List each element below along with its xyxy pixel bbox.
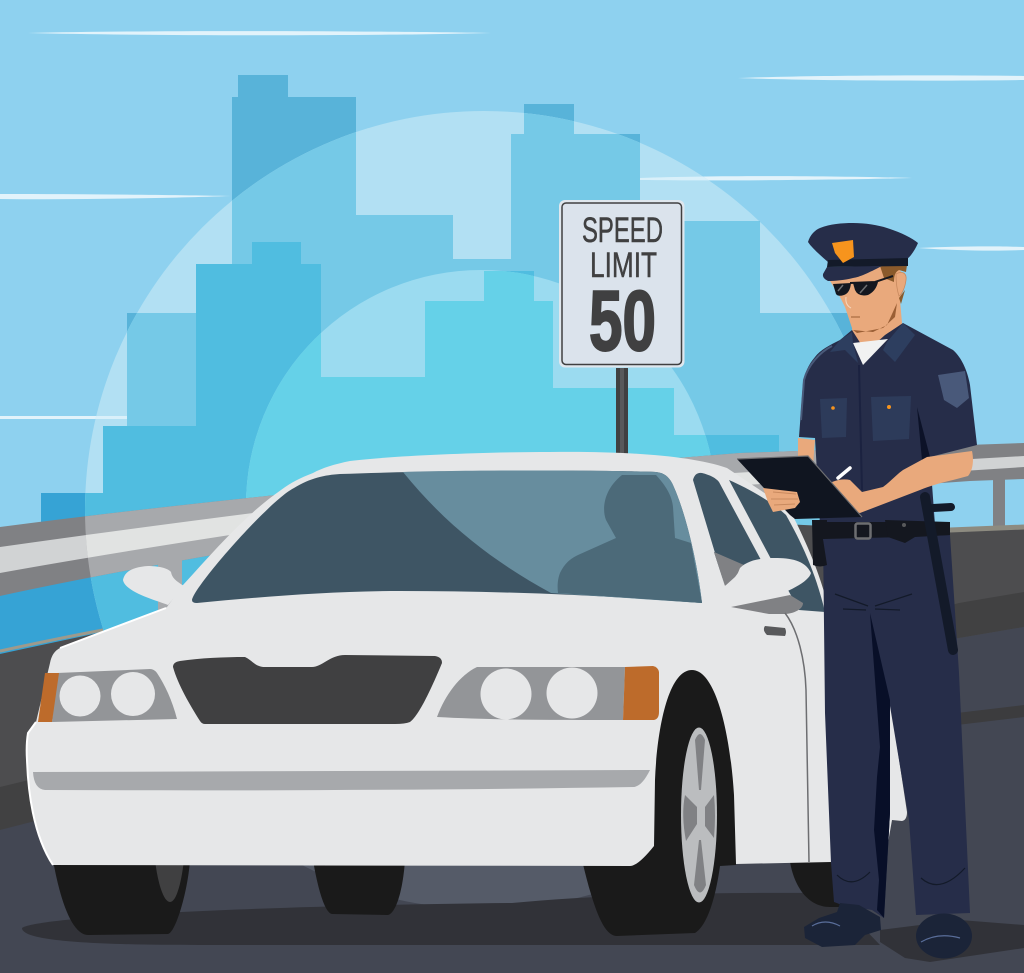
jaw shadow [853, 303, 897, 333]
road dark stripe [940, 705, 1024, 727]
sign plate [559, 200, 684, 368]
left headlight [38, 669, 177, 722]
outer dome with lighter skyline [85, 111, 844, 630]
bumper strip [33, 770, 650, 790]
door line [785, 613, 809, 862]
right shoe [916, 914, 972, 958]
right mirror [723, 558, 811, 614]
baton [925, 497, 953, 650]
road shoulder [0, 520, 1024, 973]
curb lines [0, 527, 1024, 651]
officer left arm [798, 438, 815, 465]
shoulder patch [938, 371, 969, 408]
highway guard rail [0, 443, 1024, 620]
pocket buttons [831, 405, 891, 410]
front grille [173, 655, 442, 724]
front left tire [53, 860, 190, 935]
dome reflection on road [304, 866, 591, 904]
white t-shirt [853, 339, 888, 365]
right headlight [437, 666, 659, 720]
duty belt [812, 520, 950, 566]
side windows [693, 473, 825, 612]
road surface [0, 627, 1024, 973]
placket line [859, 365, 862, 490]
dark shoulder band [0, 592, 1024, 830]
cloud streaks [0, 31, 1024, 419]
sign text: LIMIT: LIMIT [590, 246, 657, 285]
car ground shadow [22, 893, 880, 945]
collar [830, 323, 915, 363]
police cap [808, 223, 918, 281]
middle tire [313, 860, 405, 915]
white police car [27, 452, 907, 936]
car body [27, 452, 907, 866]
shirt pockets [820, 396, 911, 441]
skyline outside dome [0, 75, 870, 660]
sunglasses [833, 276, 893, 296]
left mirror [123, 566, 184, 605]
sleeve shadow [917, 407, 930, 460]
officer shadow on road [880, 920, 1024, 962]
shirt highlight [801, 346, 832, 420]
door handle [764, 626, 786, 636]
officer right arm [832, 451, 973, 513]
guard rail inside outer dome [85, 450, 816, 610]
nose highlight and mouth [846, 297, 851, 308]
left hand [763, 488, 800, 512]
trousers [823, 535, 970, 918]
trouser creases [835, 594, 965, 885]
front right tire and arch [582, 665, 736, 936]
ear [896, 272, 906, 296]
hair [880, 265, 907, 304]
clipboard [737, 456, 862, 519]
inner dome with lightest skyline [246, 270, 710, 498]
body highlight edge [27, 608, 166, 865]
rear tire [788, 850, 840, 907]
windshield [192, 470, 702, 603]
sign text: 50: 50 [589, 274, 656, 369]
sign text: SPEED: SPEED [582, 211, 663, 250]
speed limit sign [559, 200, 684, 454]
shirt torso [799, 323, 977, 525]
left shoe [804, 903, 881, 947]
pen [838, 468, 850, 478]
sign post [616, 368, 628, 454]
neck and face [830, 266, 906, 346]
police officer [737, 223, 977, 958]
